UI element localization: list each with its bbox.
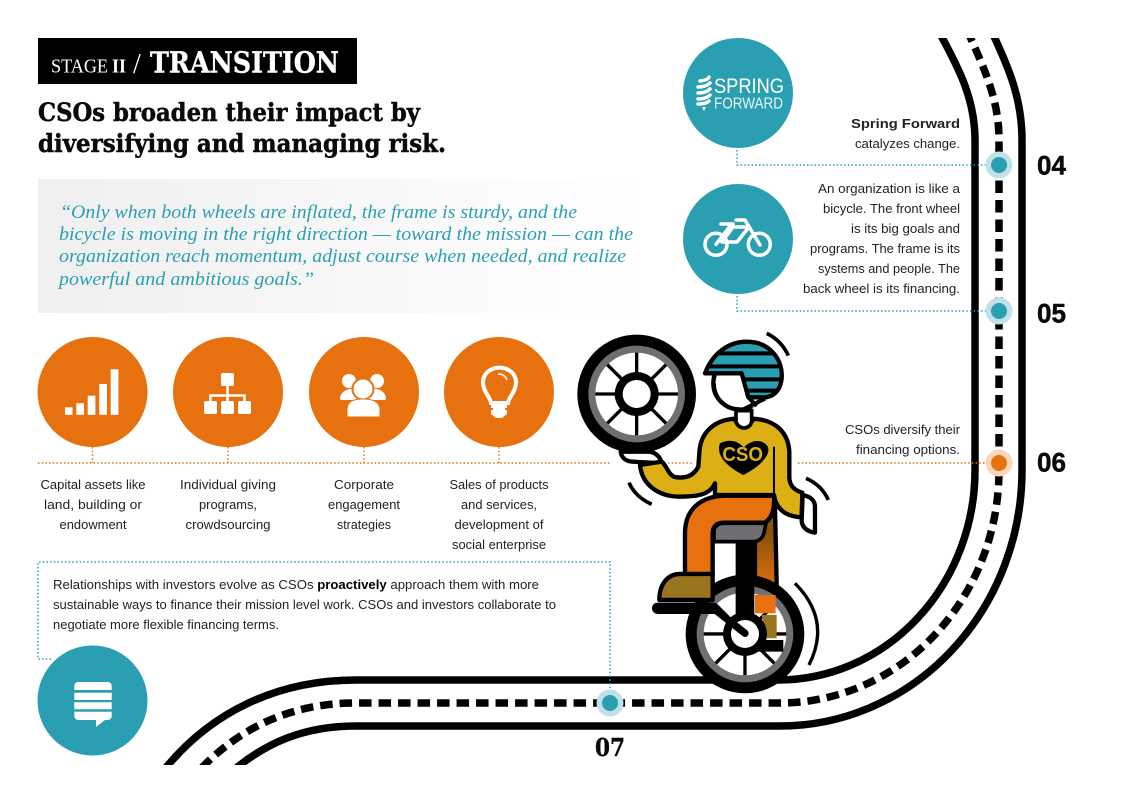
front thigh and shin <box>685 496 774 575</box>
label: sales of products: and services, <box>461 497 537 512</box>
head <box>713 357 765 409</box>
label: sales of products: Sales of products <box>450 477 549 492</box>
marker 07 <box>595 690 625 762</box>
label: capital assets <box>40 477 146 532</box>
bicycle analogy text: systems and people. The <box>818 261 960 276</box>
label: corporate engagement: strategies <box>337 517 391 532</box>
right arm and torso <box>640 419 802 517</box>
bicycle analogy text: bicycle. The front wheel <box>823 201 960 216</box>
front shoe <box>659 574 713 600</box>
icon: Spring Forward logo: FORWARD <box>714 96 783 112</box>
head fill over neck top <box>717 373 765 407</box>
investors text block: Relationships with investors evolve as CSOs proactively approach them with more <box>53 577 539 592</box>
bicycle analogy text: An organization is like a <box>818 181 961 196</box>
bicycle analogy text: back wheel is its financing. <box>803 281 960 296</box>
CSO heart logo: CSO <box>722 443 763 466</box>
heading <box>38 98 446 158</box>
header banner <box>38 38 357 84</box>
quote panel: powerful and ambitious goals.” <box>57 269 314 290</box>
label: sales of products <box>450 477 549 552</box>
financing options text: CSOs diversify their <box>845 422 961 437</box>
marker 05: 05 <box>1037 298 1066 328</box>
header banner: / <box>133 49 141 80</box>
teal dotted box around investors text <box>38 562 610 690</box>
icon: bicycle <box>683 184 793 294</box>
cyclist illustration <box>577 333 828 693</box>
hand holding wheel <box>621 452 662 463</box>
heading: CSOs broaden their impact by <box>38 98 421 127</box>
CSO heart logo <box>719 441 768 475</box>
orange dotted connectors <box>38 447 990 463</box>
icon: speech bubble <box>38 646 148 756</box>
investors text block <box>53 577 556 632</box>
heading: diversifying and managing risk. <box>38 129 446 158</box>
label: corporate engagement: engagement <box>328 497 400 512</box>
Spring Forward text: Spring Forward <box>851 116 960 131</box>
seat <box>714 523 766 542</box>
bicycle analogy text <box>803 181 961 296</box>
label: sales of products: development of <box>454 517 544 532</box>
quote panel: “Only when both wheels are inflated, the frame is sturdy, and the <box>60 202 577 223</box>
label: corporate engagement <box>328 477 400 532</box>
investors text block: sustainable ways to finance their mission level work. CSOs and investors collaborate to <box>53 597 556 612</box>
label: individual giving: crowdsourcing <box>186 517 270 532</box>
financing options text: financing options. <box>856 442 960 457</box>
marker 04: 04 <box>1037 150 1066 180</box>
label: capital assets: land, building or <box>44 497 143 512</box>
marker 04 <box>986 150 1066 180</box>
marker 06: 06 <box>1037 448 1066 478</box>
header banner: STAGE <box>51 56 108 78</box>
quote panel: bicycle is moving in the right direction — toward the mission — can the <box>59 224 633 245</box>
icon: capital assets bars <box>38 337 148 447</box>
icon: people <box>309 337 419 447</box>
rear leg <box>755 507 777 613</box>
rear wheel <box>686 575 804 693</box>
icon: org chart <box>173 337 283 447</box>
label: individual giving <box>180 477 276 532</box>
icon: light bulb <box>444 337 554 447</box>
teal dotted connectors <box>737 150 990 311</box>
helmet <box>703 342 787 397</box>
Spring Forward text: catalyzes change. <box>855 136 960 151</box>
road <box>160 30 1022 775</box>
marker 06 <box>986 448 1066 478</box>
seat post <box>736 540 754 620</box>
pedal and crank <box>658 608 745 633</box>
label: corporate engagement: Corporate <box>334 477 394 492</box>
marker 05 <box>986 298 1066 328</box>
investors text block: negotiate more flexible financing terms. <box>53 617 279 632</box>
financing options text <box>845 422 961 457</box>
quote panel: organization reach momentum, adjust course when needed, and realize <box>59 246 626 267</box>
bicycle analogy text: is its big goals and <box>851 221 960 236</box>
header banner: II <box>112 56 126 78</box>
quote panel <box>38 179 644 313</box>
front wheel <box>577 335 696 453</box>
label: capital assets: endowment <box>60 517 127 532</box>
neck <box>736 411 752 428</box>
marker 07: 07 <box>595 733 625 762</box>
icon: Spring Forward logo: SPRING <box>714 75 784 98</box>
icon: Spring Forward logo <box>683 38 793 148</box>
white cuff <box>802 495 815 533</box>
header banner: TRANSITION <box>150 46 339 80</box>
label: sales of products: social enterprise <box>452 537 546 552</box>
label: individual giving: programs, <box>199 497 257 512</box>
bicycle analogy text: programs. The frame is its <box>810 241 960 256</box>
label: capital assets: Capital assets like <box>40 477 146 492</box>
motion arcs <box>629 333 828 665</box>
Spring Forward text <box>851 116 960 151</box>
label: individual giving: Individual giving <box>180 477 276 492</box>
